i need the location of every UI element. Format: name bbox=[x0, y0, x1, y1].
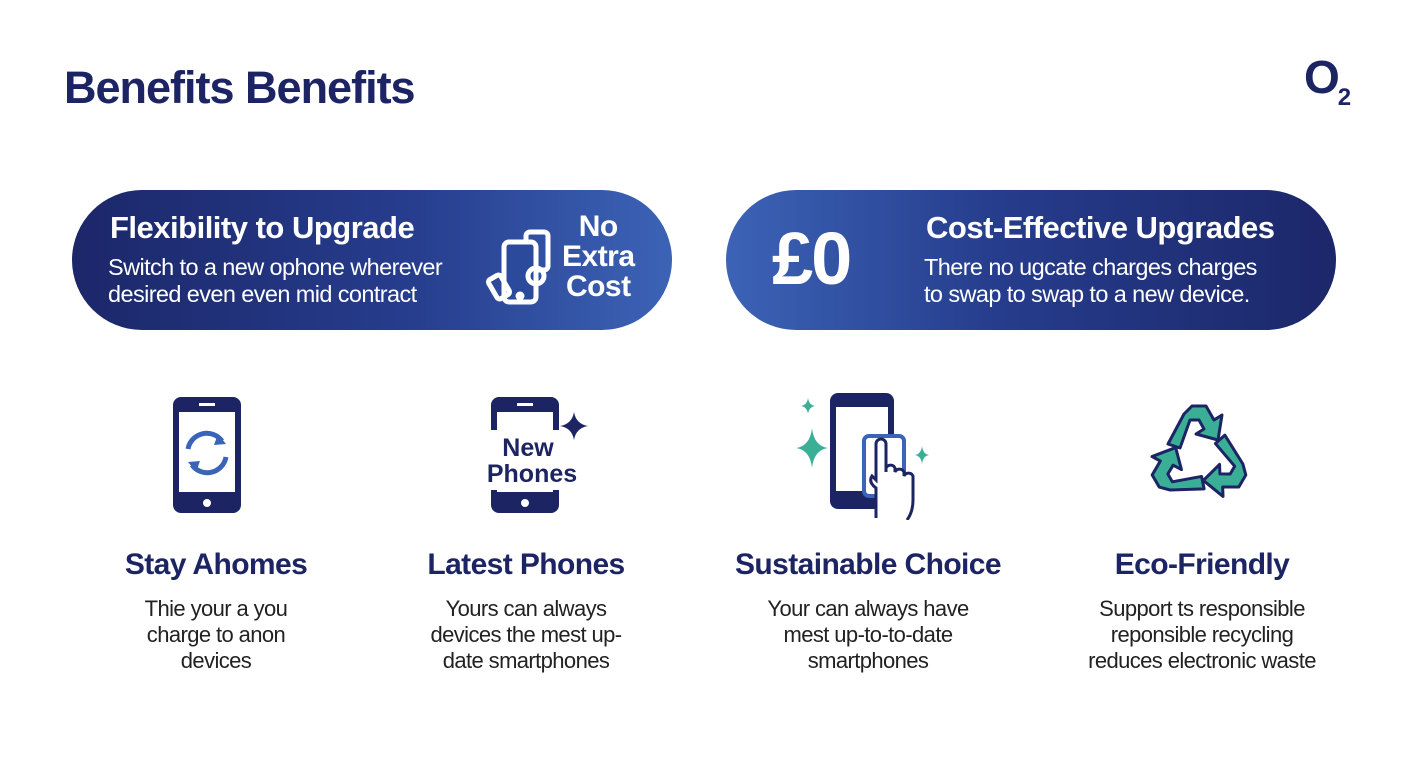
panel: flexibility bbox=[72, 190, 672, 330]
icon: phone refresh bbox=[173, 397, 241, 513]
text block: desired even even mid contract bbox=[108, 281, 417, 307]
text block: to swap to swap to a new device. bbox=[924, 281, 1250, 307]
icon: recycle bbox=[1150, 404, 1248, 498]
column: latest: date smartphones bbox=[443, 648, 609, 673]
callout: no extra cost: No bbox=[579, 210, 618, 243]
icon: phone with hand bbox=[796, 393, 929, 520]
text block bbox=[924, 254, 1257, 307]
icon: phones bbox=[486, 230, 550, 304]
column: eco: reduces electronic waste bbox=[1088, 648, 1316, 673]
text block: Switch to a new ophone wherever bbox=[108, 254, 442, 280]
callout: no extra cost: Cost bbox=[566, 270, 631, 303]
column: stay: devices bbox=[181, 648, 251, 673]
column: latest bbox=[427, 548, 625, 673]
column: sustainable: Your can always have bbox=[767, 596, 969, 621]
icon: zero pounds: £0 bbox=[772, 217, 850, 300]
column: sustainable: Sustainable Choice bbox=[735, 548, 1001, 581]
icon: new phones bbox=[488, 397, 588, 513]
column: stay: charge to anon bbox=[147, 622, 285, 647]
panel: cost-effective bbox=[726, 190, 1336, 330]
title: Benefits Benefits bbox=[64, 62, 415, 113]
column: eco: reponsible recycling bbox=[1111, 622, 1293, 647]
icon: new phones: Phones bbox=[488, 460, 577, 488]
logo: O2 bbox=[1304, 51, 1349, 111]
text block: There no ugcate charges charges bbox=[924, 254, 1257, 280]
column: eco bbox=[1088, 548, 1316, 673]
column: sustainable: smartphones bbox=[808, 648, 928, 673]
heading: Flexibility to Upgrade bbox=[110, 210, 414, 245]
text block bbox=[108, 254, 442, 307]
column: stay bbox=[125, 548, 307, 673]
column: latest: Latest Phones bbox=[427, 548, 625, 581]
column: latest: devices the mest up- bbox=[430, 622, 622, 647]
icon: new phones: New bbox=[502, 434, 554, 462]
heading: Cost-Effective Upgrades bbox=[926, 210, 1275, 245]
column: latest: Yours can always bbox=[446, 596, 606, 621]
column: sustainable: mest up-to-to-date bbox=[784, 622, 952, 647]
column: eco: Eco-Friendly bbox=[1115, 548, 1289, 581]
callout: no extra cost bbox=[562, 210, 636, 303]
column: eco: Support ts responsible bbox=[1099, 596, 1305, 621]
column: sustainable bbox=[735, 548, 1001, 673]
column: stay: Stay Ahomes bbox=[125, 548, 307, 581]
column: stay: Thie your a you bbox=[145, 596, 287, 621]
callout: no extra cost: Extra bbox=[562, 240, 635, 273]
